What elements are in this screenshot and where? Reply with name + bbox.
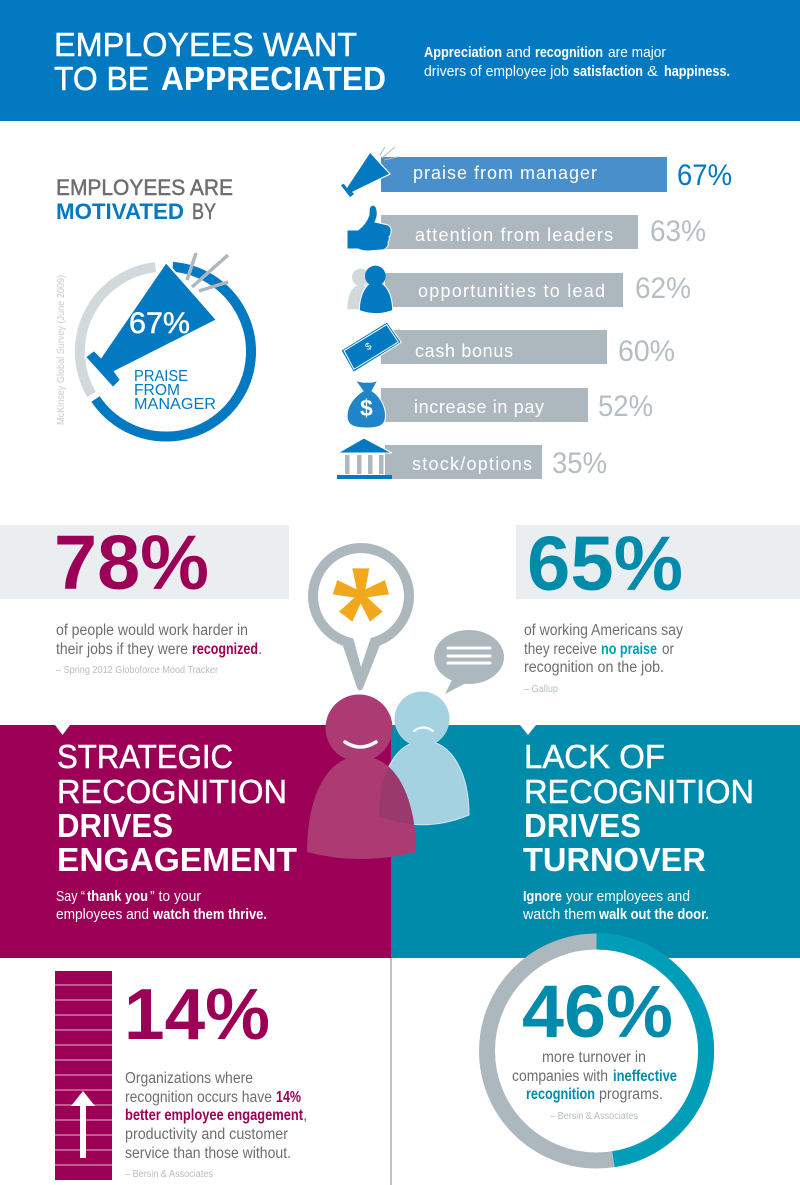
stat: 14% [124, 975, 307, 1180]
stat text: recognition occurs have [125, 1089, 272, 1106]
panel heading: TURNOVER [523, 841, 706, 878]
stat panel: 65% [516, 521, 800, 695]
panel text: your employees and [566, 888, 690, 905]
panel text [522, 888, 709, 923]
bar: cash bonus [381, 330, 675, 368]
icon: money bag: $ [360, 395, 373, 421]
icon: grey speech bubble [434, 630, 504, 694]
icon: striped bar with arrow [55, 971, 112, 1180]
bar: cash bonus: cash bonus [415, 341, 513, 361]
panel text: thank you [87, 888, 148, 905]
stat text: or [662, 641, 674, 658]
heading: employees are motivated by [56, 175, 233, 224]
stat text: 14% [276, 1089, 301, 1106]
header subtitle: & [647, 64, 658, 80]
donut value label: 67% [129, 307, 190, 340]
icon: small megaphone [340, 147, 397, 198]
bar: attention from leaders: 63% [650, 215, 706, 248]
icon: sad person [379, 692, 469, 825]
donut chart: 67% praise from manager [80, 253, 251, 437]
bar: opportunities to lead: opportunities to lead [418, 281, 605, 301]
header subtitle: are major [608, 45, 666, 61]
stat text: more turnover in [542, 1049, 646, 1066]
stat text: of people would work harder in [56, 622, 248, 639]
heading: employees are motivated by: EMPLOYEES ARE [56, 175, 233, 200]
icon: cash [341, 322, 401, 372]
header subtitle: and [506, 45, 531, 61]
heading: employees are motivated by: BY [192, 199, 216, 224]
panel text: walk out the door. [598, 906, 709, 923]
stat text: better employee engagement [125, 1107, 303, 1124]
stat text: ineffective [613, 1068, 677, 1085]
panel text [56, 888, 267, 923]
icon: happy person [307, 694, 416, 859]
header subtitle: happiness. [664, 64, 730, 80]
bar: opportunities to lead: 62% [635, 272, 691, 305]
panel heading: LACK OF [524, 738, 665, 775]
header subtitle: Appreciation [424, 45, 502, 61]
icon: people [347, 266, 393, 314]
icon: megaphone [85, 253, 228, 388]
panel heading: ENGAGEMENT [57, 841, 297, 878]
donut value [596, 941, 706, 1159]
bar: opportunities to lead [385, 272, 691, 307]
bar: praise from manager: 67% [677, 159, 732, 192]
panel heading [57, 738, 297, 878]
header subtitle: satisfaction [573, 64, 643, 80]
icon: thumbs up [347, 205, 391, 251]
bar: stock/options: 35% [552, 447, 607, 480]
panel text: watch them [522, 906, 596, 923]
bar: cash bonus: 60% [618, 335, 675, 368]
heading: employees are motivated by: MOTIVATED [56, 199, 184, 224]
bar: praise from manager: praise from manager [413, 163, 597, 183]
panel heading [523, 738, 754, 878]
stat text: of working Americans say [524, 622, 683, 639]
stat text [524, 622, 683, 676]
title: TO BE [54, 60, 149, 97]
header banner [0, 0, 800, 121]
panel heading: DRIVES [57, 807, 173, 844]
stat panel: 78% [0, 520, 289, 676]
stat text [125, 1070, 307, 1162]
stat text: recognition on the job. [524, 659, 664, 676]
source: – Gallup [524, 684, 558, 695]
donut caption: MANAGER [134, 396, 216, 413]
bar: increase in pay: 52% [598, 390, 653, 423]
icon: cash: $ [363, 341, 374, 353]
stat text: programs. [599, 1086, 663, 1103]
source: – Bersin & Associates [125, 1169, 213, 1180]
header subtitle [424, 45, 730, 80]
panel text: ” to your [150, 888, 201, 905]
donut caption [134, 368, 216, 413]
source: – Spring 2012 Globoforce Mood Tracker [56, 665, 219, 676]
bar: attention from leaders: attention from leaders [415, 225, 613, 245]
stat text: recognition [526, 1086, 595, 1103]
panel: lack of recognition [391, 725, 800, 958]
panel text: employees and [56, 906, 149, 923]
panel heading: RECOGNITION [524, 773, 754, 810]
bar: increase in pay: increase in pay [414, 397, 544, 417]
donut caption: PRAISE [134, 368, 188, 385]
stat text [512, 1049, 677, 1103]
stat number: 78% [54, 520, 209, 606]
stat text: , [303, 1107, 307, 1124]
source: McKinsey: McKinsey Global Survey (June 2009) [56, 275, 67, 425]
stat text: productivity and customer [125, 1126, 288, 1143]
bar: attention from leaders [381, 215, 706, 249]
header subtitle: recognition [535, 45, 603, 61]
donut track [80, 267, 156, 394]
stat text: service than those without. [125, 1145, 291, 1162]
bar: stock/options: stock/options [412, 454, 532, 474]
panel heading: RECOGNITION [57, 773, 287, 810]
stat number: 46% [522, 970, 673, 1053]
bar: praise from manager [381, 157, 732, 192]
bar: increase in pay [381, 388, 653, 423]
panel: strategic recognition [0, 725, 391, 958]
stat text: their jobs if they were [56, 641, 188, 658]
donut value [96, 267, 251, 437]
stat number: 65% [527, 521, 683, 607]
stat text: no praise [601, 641, 657, 658]
bar: stock/options [385, 445, 607, 480]
stat text: they receive [524, 641, 597, 658]
stat text [56, 622, 262, 658]
stat text: . [258, 641, 262, 658]
header subtitle: drivers of employee job [424, 64, 569, 80]
panel text: watch them thrive. [152, 906, 267, 923]
donut chart: 46% [487, 941, 706, 1160]
icon: money bag [347, 380, 386, 428]
title: APPRECIATED [161, 60, 386, 97]
bar chart: motivators [381, 157, 732, 480]
stat number: 14% [124, 975, 270, 1055]
icon: asterisk speech bubble [313, 548, 409, 690]
panel text: Say “ [56, 888, 85, 905]
title: EMPLOYEES WANT [54, 26, 357, 63]
stat text: recognized [192, 641, 258, 658]
donut caption: FROM [134, 382, 180, 399]
panel heading: STRATEGIC [57, 738, 233, 775]
source: – Bersin & Associates [550, 1111, 638, 1122]
stat text: Organizations where [125, 1070, 253, 1087]
panel heading: DRIVES [524, 807, 641, 844]
panel text: Ignore [523, 888, 562, 905]
stat text: companies with [512, 1068, 608, 1085]
divider [390, 958, 392, 1185]
icon: bank [337, 438, 392, 479]
title [54, 26, 386, 97]
